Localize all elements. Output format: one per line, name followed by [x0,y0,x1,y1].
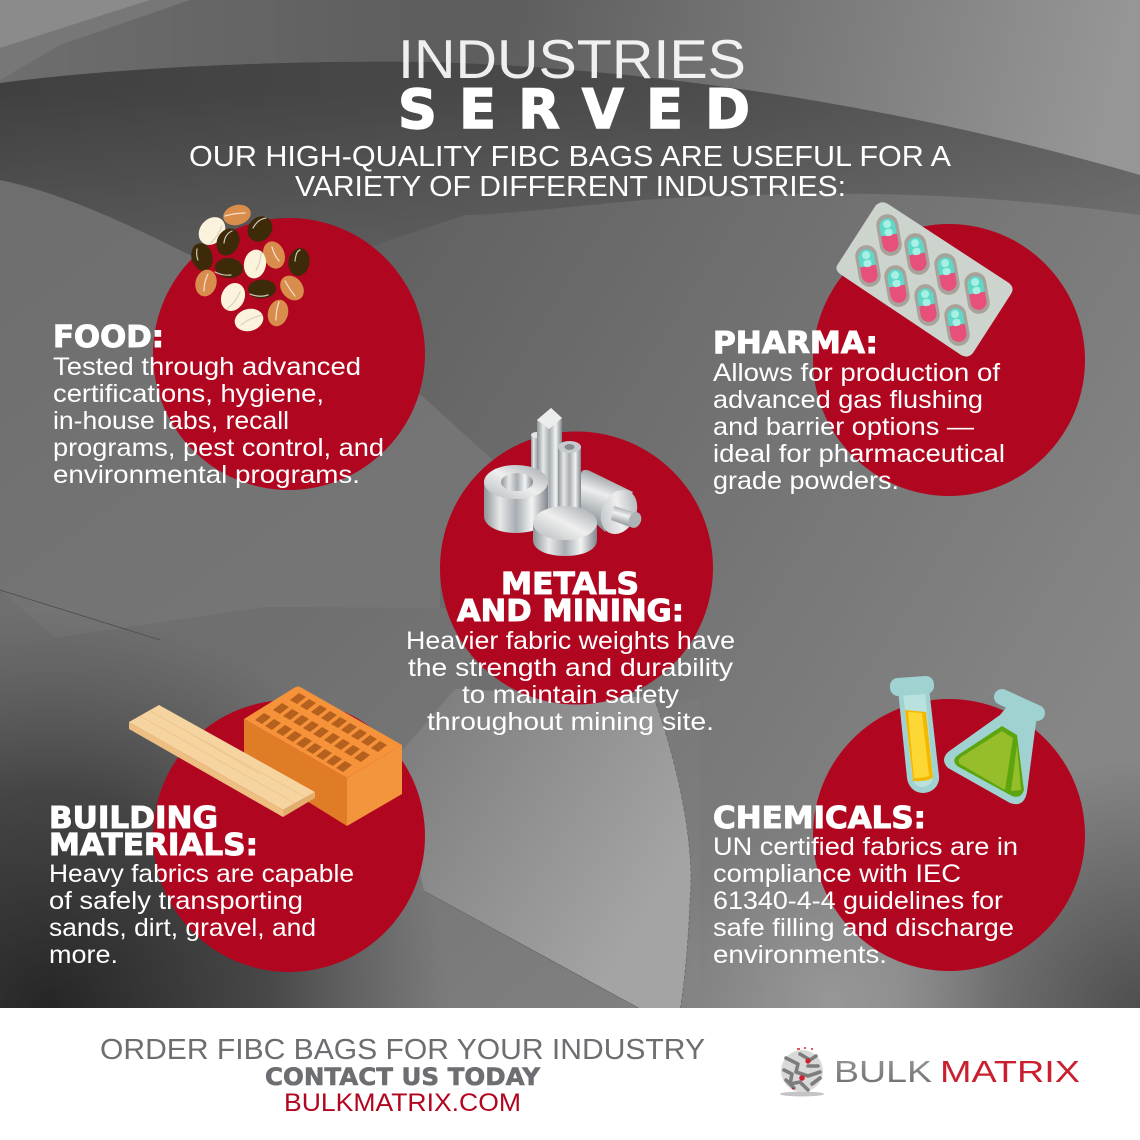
footer band [0,1008,1140,1140]
panel: pharma [713,202,1085,496]
food text: programs, pest control, and [53,434,384,462]
footer call to action: ORDER FIBC BAGS FOR YOUR INDUSTRY [100,1034,705,1066]
metals text: the strength and durability [408,654,734,682]
pharma text [713,359,1005,495]
logo [780,1048,1080,1096]
food text: environmental programs. [53,461,360,489]
chemicals text [713,833,1018,969]
building text: of safely transporting [49,887,303,915]
title [398,28,750,141]
icon: beans [188,202,312,334]
chemicals circle [813,699,1085,971]
logo sphere [780,1048,824,1096]
logo wordmark [834,1054,1080,1089]
subtitle: OUR HIGH-QUALITY FIBC BAGS ARE USEFUL FOR A [189,141,952,173]
metals heading: AND MINING: [457,594,684,629]
chemicals heading: CHEMICALS: [713,801,926,836]
footer call to action [100,1034,705,1117]
pharma heading: PHARMA: [713,326,878,361]
panel: metals and mining [406,408,735,736]
footer call to action: BULKMATRIX.COM [284,1089,521,1117]
building circle [153,700,425,972]
metals text: to maintain safety [462,681,680,709]
metals heading [457,567,684,629]
chemicals text: 61340-4-4 guidelines for [713,887,1003,915]
title: SERVED [398,78,750,141]
building text: sands, dirt, gravel, and [49,914,316,942]
building text: Heavy fabrics are capable [49,860,354,888]
pharma circle [813,224,1085,496]
building heading: MATERIALS: [49,828,258,863]
panel: building materials [49,686,425,972]
subtitle [189,141,952,203]
metals text: Heavier fabric weights have [406,627,735,655]
chemicals text: UN certified fabrics are in [713,833,1018,861]
icon: blister pack [836,202,1013,357]
icon: wood plank [129,705,315,817]
icon: test tube [889,675,939,793]
chemicals text: compliance with IEC [713,860,961,888]
icon: metal parts [484,408,644,556]
pharma text: advanced gas flushing [713,386,983,414]
logo wordmark: MATRIX [940,1054,1080,1089]
food circle [153,218,425,490]
food text: in-house labs, recall [53,407,289,435]
metals heading: METALS [501,567,639,602]
building heading: BUILDING [49,801,218,836]
building heading [49,801,258,863]
food heading: FOOD: [53,320,164,355]
logo wordmark: BULK [834,1054,932,1089]
subtitle: VARIETY OF DIFFERENT INDUSTRIES: [295,171,846,203]
pharma text: and barrier options — [713,413,974,441]
metals circle [440,432,713,704]
food text: Tested through advanced [53,353,361,381]
building text [49,860,354,969]
icon: brick [244,686,402,826]
chemicals text: environments. [713,941,887,969]
metals text: throughout mining site. [427,708,714,736]
panel: food [53,202,425,490]
building text: more. [49,941,118,969]
icon: flask [944,697,1037,804]
chemicals text: safe filling and discharge [713,914,1014,942]
food text [53,353,384,489]
pharma text: Allows for production of [713,359,1000,387]
pharma text: ideal for pharmaceutical [713,440,1005,468]
panel: chemicals [713,675,1085,971]
metals text [406,627,735,736]
pharma text: grade powders. [713,467,899,495]
title: INDUSTRIES [398,28,746,90]
food text: certifications, hygiene, [53,380,324,408]
footer call to action: CONTACT US TODAY [265,1063,541,1091]
